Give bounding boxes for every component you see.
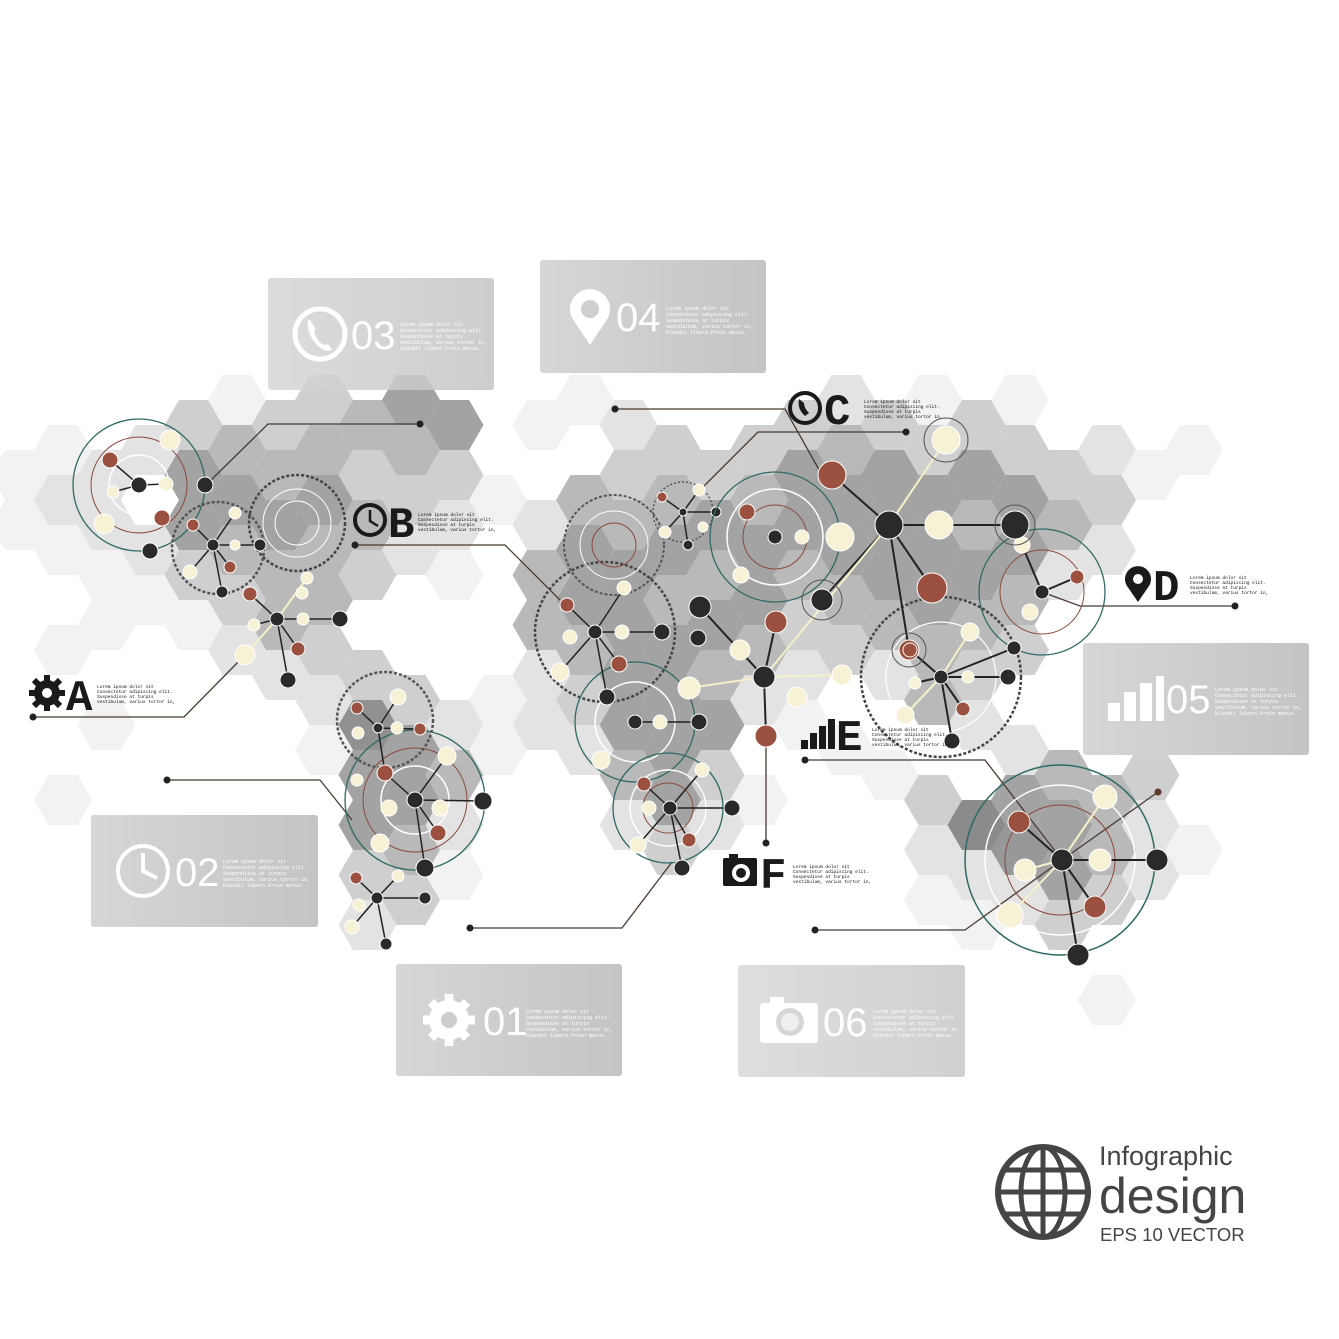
box 06: Suspendisse at turpis <box>873 1021 936 1027</box>
box 05: blandit libero.Proin metus. <box>1215 711 1296 717</box>
logo text: design <box>1099 1168 1246 1224</box>
label E: Consectetur adipiscing elit. <box>872 732 948 738</box>
box 04: Suspendisse at turpis <box>666 318 729 324</box>
label F: Lorem ipsum dolor sit <box>793 864 850 870</box>
box 05 <box>1083 643 1309 755</box>
connector lines <box>30 406 1238 934</box>
box 06: Consectetur adipiscing elit. <box>873 1015 957 1021</box>
label A: Lorem ipsum dolor sit <box>97 684 154 690</box>
cluster: north america <box>73 419 348 688</box>
box 03: Suspendisse at turpis <box>400 334 463 340</box>
label C: Consectetur adipiscing elit. <box>864 404 940 410</box>
box 05: Consectetur adipiscing elit. <box>1215 693 1299 699</box>
logo text <box>1099 1141 1246 1245</box>
label C <box>790 388 942 438</box>
icon: clock <box>118 846 168 896</box>
box 05: Suspendisse at turpis <box>1215 699 1278 705</box>
icon: gear <box>423 994 475 1046</box>
label C: Lorem ipsum dolor sit <box>864 399 921 405</box>
cluster: australia <box>965 765 1168 966</box>
label B: Suspendisse at turpis <box>418 522 475 528</box>
box 04 <box>540 260 766 373</box>
box 05: Lorem ipsum dolor sit <box>1215 687 1278 693</box>
cluster: asia <box>678 418 1105 757</box>
logo: globe <box>998 1147 1088 1237</box>
label D: vestibulum, varius tortor in, <box>1190 590 1268 596</box>
box 04: blandit libero.Proin metus. <box>666 330 747 336</box>
box 06: Lorem ipsum dolor sit <box>873 1009 936 1015</box>
box 02: 02 <box>175 851 220 895</box>
box 03: Lorem ipsum dolor sit <box>400 322 463 328</box>
box 05: vestibulum, varius tortor in, <box>1215 705 1302 711</box>
logo text: EPS 10 VECTOR <box>1100 1224 1245 1245</box>
label D: Suspendisse at turpis <box>1190 585 1247 591</box>
box 02: vestibulum, varius tortor in, <box>223 877 310 883</box>
label E: vestibulum, varius tortor in, <box>872 742 950 748</box>
label A: Consectetur adipiscing elit. <box>97 689 173 695</box>
label F: vestibulum, varius tortor in, <box>793 879 871 885</box>
label B: B <box>388 501 414 551</box>
box 01: vestibulum, varius tortor in, <box>526 1027 613 1033</box>
label C: vestibulum, varius tortor in, <box>864 414 942 420</box>
box 04: vestibulum, varius tortor in, <box>666 324 753 330</box>
label E: Suspendisse at turpis <box>872 737 929 743</box>
label D: Lorem ipsum dolor sit <box>1190 575 1247 581</box>
box 02: Consectetur adipiscing elit. <box>223 865 307 871</box>
box 06 <box>738 965 965 1077</box>
label E <box>801 714 950 764</box>
icon: bar chart <box>1108 676 1164 721</box>
label E: Lorem ipsum dolor sit <box>872 727 929 733</box>
box 02: Suspendisse at turpis <box>223 871 286 877</box>
logo text: Infographic <box>1099 1141 1233 1171</box>
label B: vestibulum, varius tortor in, <box>418 527 496 533</box>
label A: vestibulum, varius tortor in, <box>97 699 175 705</box>
box 03: 03 <box>351 314 396 358</box>
label F: F <box>760 852 786 902</box>
box 06: 06 <box>823 1001 868 1045</box>
box 02 <box>91 815 318 927</box>
box 01: Lorem ipsum dolor sit <box>526 1009 589 1015</box>
box 03: vestibulum, varius tortor in, <box>400 340 487 346</box>
box 04: Consectetur adipiscing elit. <box>666 312 750 318</box>
icon: phone <box>295 309 345 359</box>
label D: Consectetur adipiscing elit. <box>1190 580 1266 586</box>
box 01 <box>396 964 622 1076</box>
label A: Suspendisse at turpis <box>97 694 154 700</box>
box 05: 05 <box>1166 678 1210 722</box>
label F <box>723 852 871 902</box>
box 04: 04 <box>616 296 660 340</box>
box 01: 01 <box>483 1000 528 1044</box>
label C: C <box>824 388 850 438</box>
cluster: europe and africa <box>535 482 740 876</box>
box 02: blandit libero.Proin metus. <box>223 883 304 889</box>
box 01: blandit libero.Proin metus. <box>526 1033 607 1039</box>
label D: D <box>1153 564 1179 614</box>
box 03: Consectetur adipiscing elit. <box>400 328 484 334</box>
label F: Consectetur adipiscing elit. <box>793 869 869 875</box>
hexagon world map <box>0 375 1223 1025</box>
box 03: blandit libero.Proin metus. <box>400 346 481 352</box>
label B: Consectetur adipiscing elit. <box>418 517 494 523</box>
box 04: Lorem ipsum dolor sit <box>666 306 729 312</box>
box 03 <box>268 278 494 390</box>
label A: A <box>66 674 93 724</box>
label F: Suspendisse at turpis <box>793 874 850 880</box>
label D <box>1125 564 1268 614</box>
box 02: Lorem ipsum dolor sit <box>223 859 286 865</box>
icon: location pin <box>570 289 610 345</box>
box 01: Suspendisse at turpis <box>526 1021 589 1027</box>
box 06: vestibulum, varius tortor in, <box>873 1027 960 1033</box>
cluster: south america <box>337 672 492 950</box>
icon: camera <box>760 997 818 1043</box>
box 06: blandit libero.Proin metus. <box>873 1033 954 1039</box>
box 01: Consectetur adipiscing elit. <box>526 1015 610 1021</box>
label C: Suspendisse at turpis <box>864 409 921 415</box>
label B: Lorem ipsum dolor sit <box>418 512 475 518</box>
label B <box>355 501 496 551</box>
label A <box>29 674 175 724</box>
label E: E <box>836 714 862 764</box>
